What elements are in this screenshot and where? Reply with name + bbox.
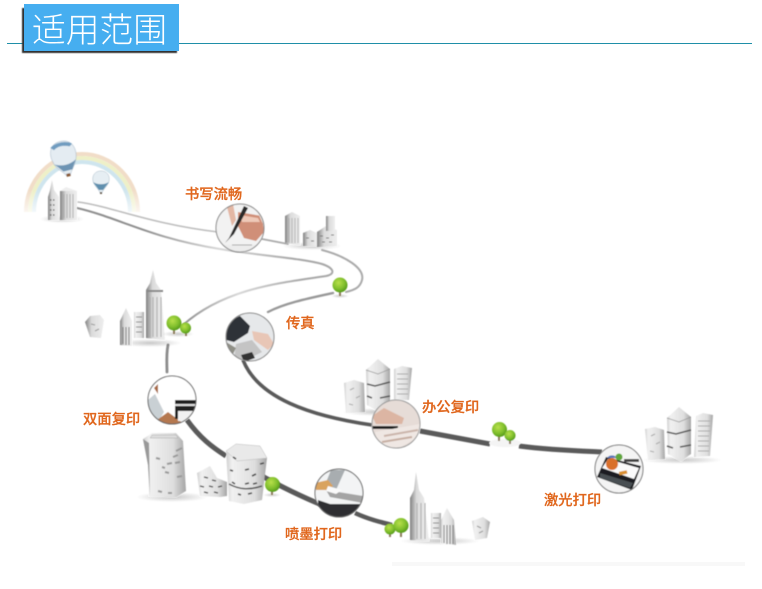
buildings: upper right city (282, 212, 342, 250)
road: dark lower routes (187, 360, 602, 525)
circle: laser (595, 445, 643, 493)
label: writing: 书写流畅 (185, 186, 242, 203)
faint ground band (392, 562, 745, 566)
road: light upper route (77, 202, 362, 372)
buildings: copier tower city (136, 433, 267, 504)
rainbow (18, 154, 144, 220)
trees: bottom city (384, 518, 408, 537)
tree: route upper (331, 278, 349, 298)
icon: large balloon (48, 138, 81, 179)
title banner: 适用范围 (32, 12, 167, 50)
circle: office copy (372, 400, 420, 450)
circle: inkjet (315, 469, 363, 517)
label: office copy: 办公复印 (422, 399, 479, 416)
title banner (22, 4, 179, 53)
header rule (7, 43, 752, 44)
icon: small balloon (93, 171, 109, 194)
buildings: bottom city (400, 472, 490, 545)
circle: fax (226, 313, 274, 362)
buildings: middle left city (85, 270, 182, 347)
circle: duplex copy (148, 376, 196, 426)
buildings: start city (40, 180, 84, 223)
trees: office road (489, 422, 521, 447)
circle: writing (216, 204, 268, 254)
label: fax: 传真 (286, 314, 315, 332)
label: laser printing: 激光打印 (544, 492, 601, 509)
trees: middle left (162, 316, 194, 337)
label: inkjet printing: 喷墨打印 (285, 526, 342, 543)
buildings: far right city (642, 407, 722, 464)
tree: copier city (263, 477, 281, 497)
label: duplex copy: 双面复印 (83, 411, 140, 428)
buildings: office city (342, 359, 414, 416)
